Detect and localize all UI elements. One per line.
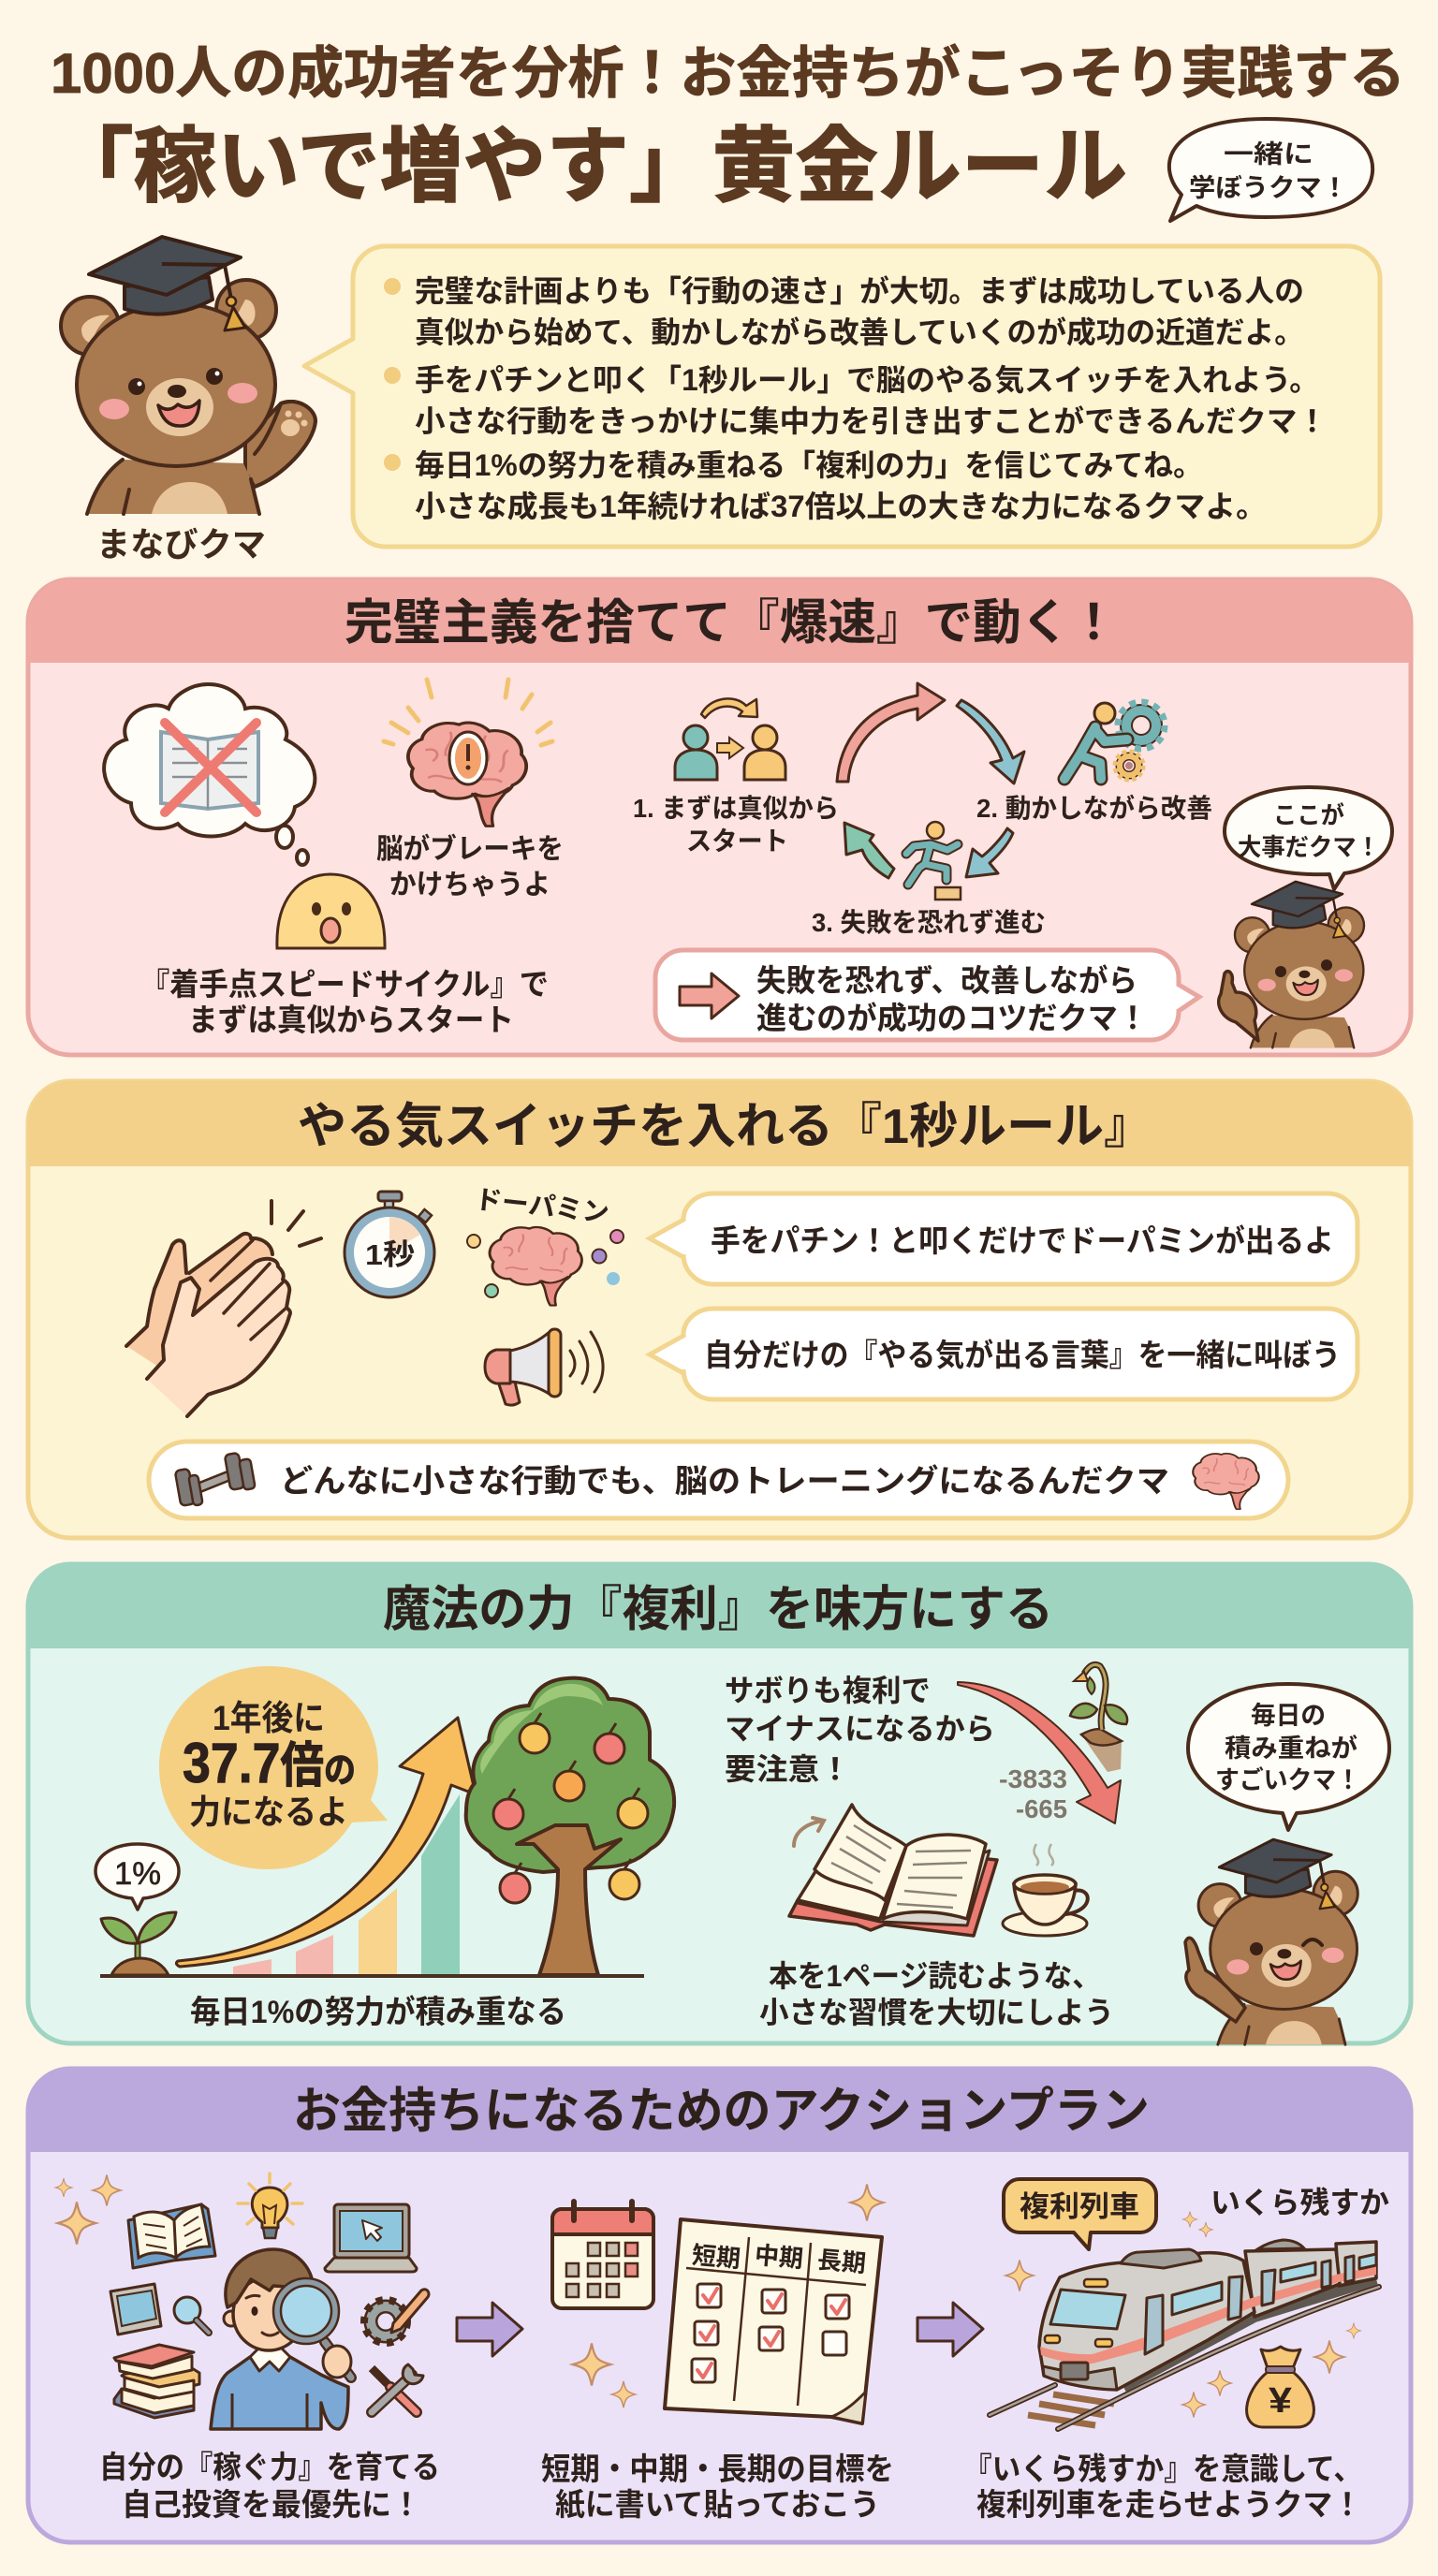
icon: light bulb — [238, 2174, 302, 2238]
bars — [233, 1794, 460, 1975]
icon: gear and pencil — [364, 2290, 429, 2343]
arrow: step 2 to 3 — [917, 2303, 983, 2356]
label: brain brake — [376, 833, 564, 900]
arrow: blue cycle — [957, 700, 1024, 783]
title line 2: 「稼いで増やす」黄金ルール — [51, 120, 1127, 212]
tree — [466, 1678, 674, 1975]
label: brain brake: かけちゃうよ — [389, 870, 550, 900]
callout: 37.7倍 — [159, 1666, 388, 1869]
label: step 2: 2. 動かしながら改善 — [976, 793, 1212, 823]
caption: step 3 — [963, 2452, 1362, 2522]
bubble: ここが大事: ここが — [1273, 801, 1344, 829]
bubble: ここが大事: 大事だクマ！ — [1238, 833, 1380, 861]
numbers: -3833 — [999, 1764, 1067, 1793]
text: speed cycle: 『着手点スピードサイクル』で — [140, 967, 549, 1002]
bullet 3 — [384, 448, 1267, 523]
arrow: pink cycle — [837, 683, 945, 782]
bubble: clap: 手をパチン！と叩くだけでドーパミンが出るよ — [711, 1223, 1334, 1258]
apples — [493, 1713, 648, 1903]
label: step 1: 1. まずは真似から — [633, 794, 839, 823]
text: speed cycle — [140, 967, 549, 1037]
bullet 2 — [384, 363, 1328, 438]
panel: アクションプラン — [28, 2069, 1411, 2542]
icon: sprout — [101, 1912, 176, 1975]
callout: 37.7倍: 37.7倍の — [183, 1732, 356, 1794]
label: step 3: 3. 失敗を恐れず進む — [812, 908, 1046, 937]
caption: step 2: 紙に書いて貼っておこう — [555, 2487, 880, 2522]
arrow: green cycle — [844, 823, 894, 878]
panel heading: 魔法の力『複利』を味方にする — [383, 1583, 1053, 1637]
sparkles middle — [573, 2185, 884, 2408]
icon: calendar — [552, 2202, 653, 2308]
bullet 3: 小さな成長も1年続ければ37倍以上の大きな力になるクマよ。 — [415, 490, 1267, 523]
panel heading: 完璧主義を捨てて『爆速』で動く！ — [345, 596, 1118, 651]
pill: brain training — [149, 1442, 1288, 1518]
icon: railway track — [990, 2287, 1379, 2429]
bubble: 一緒に学ぼうクマ: 一緒に — [1224, 140, 1313, 168]
panel heading: お金持ちになるためのアクションプラン — [293, 2085, 1150, 2139]
text: speed cycle: まずは真似からスタート — [188, 1003, 514, 1037]
label: step 1: スタート — [686, 827, 788, 856]
callout: tips: 進むのが成功のコツだクマ！ — [756, 1001, 1148, 1035]
caption: step 2: 短期・中期・長期の目標を — [541, 2452, 894, 2486]
check marks — [697, 2289, 845, 2378]
text: warning: マイナスになるから — [725, 1712, 995, 1746]
icon: train — [1039, 2240, 1376, 2390]
bubble: 毎日の積み重ねが: 積み重ねが — [1225, 1734, 1357, 1763]
icon: money bag: ¥ — [1269, 2381, 1292, 2421]
caption: step 1: 自己投資を最優先に！ — [122, 2487, 421, 2522]
icon: tools — [372, 2364, 423, 2412]
bubble: 毎日の積み重ねが — [1188, 1684, 1389, 1830]
bullet 3: 毎日1%の努力を積み重ねる「複利の力」を信じてみてね。 — [415, 448, 1203, 482]
text: warning: サボりも複利で — [725, 1674, 931, 1707]
checkboxes — [692, 2284, 849, 2382]
bubble: clap — [650, 1193, 1357, 1284]
bullet 2: 手をパチンと叩く「1秒ルール」で脳のやる気スイッチを入れよう。 — [415, 363, 1319, 397]
mascot name: まなびクマ — [96, 525, 266, 564]
panel: intro speech bubble — [304, 246, 1380, 547]
numbers: -665 — [1016, 1794, 1067, 1823]
icon: coffee cup — [1003, 1844, 1088, 1936]
panel header — [28, 2069, 1411, 2152]
callout: tips: 失敗を恐れず、改善しながら — [756, 963, 1137, 998]
text: warning: 要注意！ — [725, 1752, 851, 1786]
icon: clapping hands — [126, 1201, 321, 1416]
icon: money bag — [1247, 2347, 1313, 2427]
icon: tablet and magnifier — [110, 2284, 209, 2334]
text: warning — [725, 1674, 995, 1786]
bullet 1 — [384, 274, 1304, 349]
callout: tips — [655, 950, 1199, 1040]
caption: step 1 — [99, 2450, 440, 2522]
panel: 複利 — [28, 1564, 1411, 2044]
caption: step 3: 複利列車を走らせようクマ！ — [976, 2487, 1362, 2522]
title line 1: 1000人の成功者を分析！お金持ちがこっそり実践する — [51, 42, 1405, 105]
icon: stopwatch 1秒: 1秒 — [365, 1238, 415, 1271]
panel header — [28, 1564, 1411, 1648]
icon: pink arrow — [680, 973, 739, 1018]
icon: runner — [906, 822, 961, 900]
bubble: 複利列車: 複利列車 — [1020, 2190, 1139, 2223]
bubble: 一緒に学ぼうクマ: 学ぼうクマ！ — [1189, 174, 1348, 202]
icon: withered plant — [1070, 1664, 1127, 1772]
icon: stopwatch 1秒 — [345, 1192, 434, 1297]
callout: 37.7倍: 力になるよ — [189, 1793, 348, 1831]
panel: 完璧主義 — [28, 579, 1411, 1055]
icon: dumbbell — [175, 1453, 256, 1506]
bubble: words — [650, 1309, 1357, 1399]
icon: goal sheet: 短期 — [691, 2241, 741, 2273]
arrow: blue cycle lower — [966, 828, 1013, 877]
icon: goal sheet — [665, 2219, 882, 2423]
label: step 1 — [633, 794, 839, 856]
bullet 1: 完璧な計画よりも「行動の速さ」が大切。まずは成功している人の — [415, 274, 1304, 308]
icon: thought cloud with crossed book — [104, 684, 315, 865]
arrow: downward red — [958, 1682, 1121, 1823]
icon: book — [128, 2204, 215, 2268]
numbers — [999, 1764, 1067, 1823]
panel heading: やる気スイッチを入れる『1秒ルール』 — [298, 1100, 1152, 1154]
caption: daily 1%: 毎日1%の努力が積み重なる — [190, 1994, 566, 2030]
icon: goal sheet: 長期 — [816, 2246, 867, 2277]
bubble: 一緒に学ぼうクマ — [1169, 119, 1372, 221]
caption: small habits: 本を1ページ読むような、 — [769, 1959, 1101, 1993]
icon: laptop — [325, 2204, 417, 2272]
sparkles right — [1005, 2212, 1361, 2417]
icon: chick — [277, 874, 385, 948]
icon: brain with dopamine — [467, 1227, 624, 1306]
label: いくら残すか: いくら残すか — [1211, 2186, 1389, 2219]
bubble: 毎日の積み重ねが: すごいクマ！ — [1215, 1765, 1360, 1794]
figure: person with magnifier — [211, 2249, 351, 2429]
mascot: まなびクマ — [61, 237, 315, 514]
bubble: 毎日の積み重ねが: 毎日の — [1251, 1702, 1326, 1730]
arrow: step 1 to 2 — [457, 2303, 522, 2356]
caption: step 3: 『いくら残すか』を意識して、 — [963, 2452, 1362, 2486]
ground line — [100, 1974, 644, 1978]
bullet 2: 小さな行動をきっかけに集中力を引き出すことができるんだクマ！ — [415, 404, 1328, 438]
icon: brain with alert — [384, 680, 552, 827]
mascot: bear thumbs up — [1219, 882, 1364, 1047]
bubble: 1%: 1% — [114, 1856, 161, 1892]
icon: goal sheet: 中期 — [754, 2241, 804, 2273]
label: dopamine: ドーパミン — [474, 1185, 610, 1227]
bubble: 1% — [95, 1844, 179, 1910]
bubble: 複利列車 — [1004, 2179, 1156, 2249]
icon: imitate persons — [675, 698, 785, 780]
panel header — [28, 579, 1411, 663]
icon: small brain — [1193, 1454, 1259, 1509]
panel: 1秒ルール — [28, 1081, 1411, 1538]
label: brain brake: 脳がブレーキを — [376, 833, 564, 865]
caption: small habits — [759, 1959, 1114, 2029]
arrow: growth — [176, 1718, 476, 1967]
callout: 37.7倍: 1年後に — [213, 1699, 325, 1737]
icon: open book — [789, 1805, 997, 1936]
caption: step 1: 自分の『稼ぐ力』を育てる — [99, 2450, 440, 2484]
caption: small habits: 小さな習慣を大切にしよう — [759, 1996, 1114, 2029]
caption: step 2 — [541, 2452, 894, 2522]
icon: gear person — [1064, 702, 1165, 780]
bullet 1: 真似から始めて、動かしながら改善していくのが成功の近道だよ。 — [415, 315, 1304, 349]
sparkles left — [55, 2175, 121, 2245]
bubble: ここが大事 — [1225, 787, 1392, 889]
icon: stack of books — [114, 2345, 199, 2418]
pill: brain training: どんなに小さな行動でも、脳のトレーニングになるんだクマ — [280, 1464, 1169, 1500]
bubble: words: 自分だけの『やる気が出る言葉』を一緒に叫ぼう — [704, 1338, 1341, 1372]
panel header — [28, 1081, 1411, 1166]
mascot: bear pointing winking — [1185, 1839, 1357, 2044]
icon: megaphone — [485, 1329, 603, 1405]
